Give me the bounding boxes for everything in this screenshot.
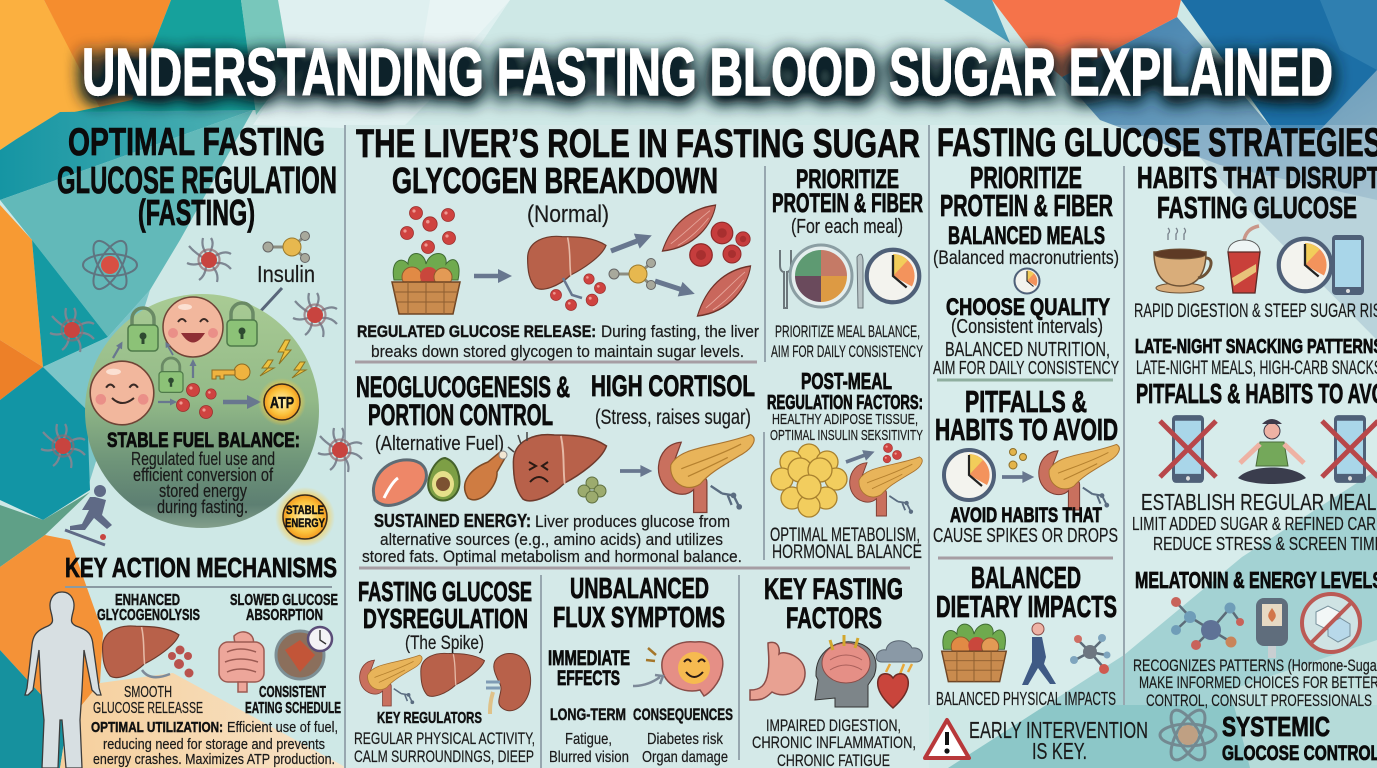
heading: PROTEIN & FIBER [772, 188, 923, 218]
heading: KEY FASTING [764, 573, 903, 606]
icon: glucose dots [176, 384, 216, 418]
heading: glycogen breakdown: GLYCOGEN BREAKDOWN [392, 160, 718, 201]
icon: phone [1332, 235, 1364, 295]
icon: walking person [1022, 623, 1056, 685]
text: key fasting factors list: IMPAIRED DIGESTION, [766, 716, 901, 735]
text: optimal utilization: OPTIMAL UTILIZATION: [91, 719, 223, 736]
icon: salmon [373, 460, 426, 505]
icon: ATP [258, 378, 306, 426]
icon: storm cloud [876, 641, 922, 674]
icon: heart [878, 674, 908, 708]
text: key fasting factors list: CHRONIC INFLAMMATION, [752, 733, 916, 752]
heading: FLUX SYMPTOMS [553, 602, 725, 634]
icon: coffee cup [1154, 228, 1211, 293]
text: sustained energy: SUSTAINED ENERGY: [374, 511, 531, 531]
icon: kidney [486, 653, 531, 714]
text: sustained energy [362, 511, 742, 566]
text: slowed glucose absorption [230, 592, 338, 624]
text: avoid habits: CAUSE SPIKES OR DROPS [933, 525, 1118, 547]
pointer line: insulin [258, 288, 282, 314]
text: long-term consequences: CONSEQUENCES [633, 705, 733, 724]
badge: stable energy: ENERGY [285, 516, 325, 530]
text: avoid habits: AVOID HABITS THAT [950, 504, 1102, 527]
panel: glycogen breakdown [355, 160, 759, 362]
text: balanced meals [933, 222, 1119, 269]
icon: crossed phone [1160, 415, 1216, 483]
heading: high cortisol: (Stress, raises sugar) [595, 406, 751, 429]
text: choose quality: BALANCED NUTRITION, [945, 339, 1110, 361]
heading: post-meal: OPTIMAL INSULIN SEKSITIVITY [770, 427, 923, 444]
heading: FASTING GLUCOSE [358, 576, 532, 607]
text: key fasting factors list [752, 716, 916, 768]
text: prioritize meal balance: PRIORITIZE MEAL BALANCE, [775, 322, 920, 341]
text: optimal metabolism: OPTIMAL METABOLISM, [770, 525, 920, 546]
icon: locks [128, 303, 257, 392]
heading: optimal fasting glucose regulation: OPTIMAL FASTING [68, 121, 325, 164]
text: enhanced glycogenolysis: GLYCOGENOLYSIS [97, 607, 200, 624]
panel: prioritize protein and fiber, meal [771, 164, 923, 361]
icon: molecule [609, 258, 656, 290]
panel: post-meal regulation factors [767, 368, 923, 563]
arrow [474, 269, 512, 283]
heading: FACTORS [786, 602, 882, 635]
label: insulin: Insulin [257, 261, 315, 287]
text: establish regular meals [1132, 489, 1377, 554]
heading: neoglucogenesis: NEOGLUCOGENESIS & [356, 371, 570, 404]
heading: glycogen breakdown: (Normal) [527, 201, 609, 228]
panel: unbalanced flux symptoms [548, 573, 733, 766]
icon: head with brain [815, 635, 876, 707]
heading: UNBALANCED [570, 573, 709, 605]
icon: pancreas [1039, 444, 1119, 510]
icon: liver [421, 653, 484, 696]
icon: molecule [1171, 597, 1244, 650]
text: balanced meals: (Balanced macronutrients) [933, 248, 1119, 269]
icon: chicken drumstick [465, 451, 507, 500]
circle: stable fuel balance [85, 294, 319, 528]
text: consistent eating schedule: CONSISTENT [259, 684, 326, 701]
heading: high cortisol [591, 370, 755, 429]
text: avoid habits [933, 504, 1118, 547]
text: stable fuel balance [107, 429, 300, 517]
arrow [608, 228, 655, 259]
icon: small clock [1014, 268, 1040, 294]
text: choose quality: CHOOSE QUALITY [946, 294, 1110, 321]
icon: glucose dots [883, 443, 902, 463]
text: optimal utilization: energy crashes. Maximizes ATP production. [93, 751, 335, 768]
heading: optimal fasting glucose regulation: GLUCOSE REGULATION [57, 160, 337, 202]
icon: pancreas [850, 457, 922, 516]
callout: systemic glucose control [1160, 705, 1377, 765]
icon: intestines [219, 632, 264, 692]
panel: strategies left column [933, 160, 1119, 709]
panel: key fasting factors [750, 573, 922, 768]
icon: warning triangle [925, 720, 969, 758]
text: late-night snacking [1135, 336, 1377, 379]
text: prioritize meal balance [771, 322, 923, 361]
text: choose quality: (Consistent intervals) [951, 316, 1103, 338]
text: stable fuel balance: STABLE FUEL BALANCE: [107, 429, 300, 452]
icon: molecule [1070, 634, 1110, 674]
text: smooth glucose release: SMOOTH [124, 684, 172, 701]
icon: stressed liver [508, 432, 606, 501]
text: optimal metabolism: HORMONAL BALANCE [772, 542, 922, 563]
callout: early intervention [925, 717, 1148, 764]
icon: key [212, 364, 250, 380]
heading [772, 164, 923, 238]
text: long-term consequences: Fatigue, [565, 731, 612, 748]
panel: neoglucogenesis and high cortisol [356, 370, 755, 566]
text: recognizes patterns [1133, 656, 1377, 710]
heading: pitfalls and habits to avoid: PITFALLS & [965, 384, 1087, 419]
heading: the liver's role: THE LIVER’S ROLE IN FASTING SUGAR [356, 122, 920, 166]
heading: prioritize protein and fiber [940, 160, 1113, 223]
text: consistent eating schedule [245, 684, 341, 717]
text: long-term consequences: LONG-TERM [550, 705, 626, 724]
text: choose quality: AIM FOR DAILY CONSISTENCY [933, 358, 1119, 378]
heading: post-meal: POST-MEAL [801, 368, 892, 394]
text: key regulators: KEY REGULATORS [377, 710, 482, 727]
heading: prioritize protein and fiber: PRIORITIZE [970, 160, 1082, 195]
icon: adipose tissue [771, 444, 847, 517]
text: early intervention: IS KEY. [1032, 738, 1087, 764]
heading: prioritize protein and fiber: PROTEIN & FIBER [940, 188, 1113, 223]
icon: pancreas [360, 655, 422, 706]
heading: key action mechanisms: KEY ACTION MECHANISMS [65, 552, 337, 583]
icon: lightning [260, 340, 306, 378]
text: key regulators: CALM SURROUNDINGS, DIEEP [354, 747, 534, 766]
heading: pitfalls and habits to avoid [935, 384, 1118, 447]
icon: virus particles [41, 238, 362, 472]
text: optimal utilization: reducing need for storage and prevents [103, 736, 325, 753]
icon: glucose dots falling [400, 206, 456, 254]
text: early intervention: EARLY INTERVENTION [969, 717, 1148, 743]
icon: avocado [428, 458, 459, 500]
text: smooth glucose release [93, 684, 203, 717]
text: systemic glucose control: SYSTEMIC [1222, 711, 1330, 742]
icon: happy brain [646, 642, 723, 696]
arrows [110, 340, 261, 409]
heading: balanced dietary impacts: DIETARY IMPACTS [936, 589, 1117, 624]
text: key regulators: REGULAR PHYSICAL ACTIVITY, [354, 729, 535, 748]
text: long-term consequences [549, 705, 733, 766]
text: sustained energy: alternative sources (e.g., amino acids) and utilizes [380, 530, 723, 549]
icon: liver [528, 236, 606, 289]
icon: clock [944, 450, 994, 500]
heading: optimal fasting glucose regulation [57, 121, 337, 233]
heading: neoglucogenesis [356, 371, 570, 455]
text: systemic glucose control [1222, 711, 1377, 765]
text: regulated glucose release: During fasting, the liver [601, 322, 759, 341]
icon: muscles [662, 205, 751, 316]
heading: neoglucogenesis: PORTION CONTROL [368, 399, 553, 432]
heading: post-meal [767, 368, 923, 444]
icon: soda cup [1228, 226, 1260, 293]
icon: runner [65, 485, 112, 545]
icon: plate with clock [276, 627, 332, 679]
panel: key action mechanisms [25, 552, 341, 768]
text: stable fuel balance: Regulated fuel use and [131, 449, 275, 469]
panel: fasting glucose dysregulation [354, 576, 535, 766]
text: regulated glucose release [357, 322, 759, 361]
text: stable fuel balance: stored energy [159, 481, 247, 501]
heading: (The Spike) [405, 633, 484, 654]
text: balanced meals: BALANCED MEALS [948, 222, 1105, 250]
text: immediate effects: EFFECTS [557, 667, 620, 690]
text: optimal metabolism [770, 525, 922, 563]
icon: clock [867, 250, 919, 302]
heading [358, 576, 532, 654]
heading: DYSREGULATION [363, 603, 528, 634]
heading [553, 573, 725, 634]
icon: no sugar [1302, 594, 1360, 652]
heading: pitfalls and habits to avoid: HABITS TO AVOID [935, 412, 1118, 447]
icon: liver with glucose [103, 626, 194, 678]
icon: glucose meter [1256, 598, 1288, 658]
icon: atom [1160, 705, 1216, 765]
icon: crossed phone [1322, 415, 1377, 483]
icon: meditating person [1238, 419, 1306, 484]
icon: clock [1279, 239, 1331, 291]
heading: balanced dietary impacts [936, 560, 1117, 624]
heading: habits that disrupt [1137, 160, 1377, 225]
icon: stomach [750, 642, 805, 700]
icon: insulin molecule [263, 232, 310, 262]
text: long-term consequences: Diabetes risk [647, 731, 724, 748]
heading: neoglucogenesis: (Alternative Fuel) [375, 433, 504, 455]
text: smooth glucose release: GLUCOSE RELEASSE [93, 700, 203, 717]
text: optimal utilization: Efficient use of fuel, [227, 719, 338, 736]
badge: stable energy [275, 487, 335, 547]
icon: atom [83, 236, 137, 294]
icon: falling dots and arrow [1002, 448, 1034, 483]
panel: optimal fasting glucose regulation [41, 121, 362, 547]
text: early intervention [969, 717, 1148, 764]
heading: balanced dietary impacts: BALANCED [971, 560, 1081, 595]
icon: food basket [942, 624, 1006, 682]
heading [764, 573, 903, 635]
icon: pancreas [658, 435, 754, 512]
icon: red blood cells [690, 222, 750, 266]
text: key regulators [354, 710, 535, 766]
text: regulated glucose release: REGULATED GLUCOSE RELEASE: [357, 322, 596, 341]
text: enhanced glycogenolysis [97, 592, 200, 624]
heading: PRIORITIZE [796, 164, 899, 194]
arrow [844, 446, 876, 467]
heading: high cortisol: HIGH CORTISOL [591, 370, 755, 403]
column dividers [345, 125, 1124, 768]
arrow [620, 465, 652, 477]
text: sustained energy: stored fats. Optimal metabolism and hormonal balance. [362, 547, 742, 566]
text: regulated glucose release: breaks down stored glycogen to maintain sugar levels. [371, 342, 744, 361]
icon: human body [25, 592, 101, 768]
text: long-term consequences: Organ damage [642, 749, 728, 766]
text: sustained energy: Liver produces glucose from [535, 512, 730, 531]
text: immediate effects: IMMEDIATE [548, 647, 630, 670]
icon: happy cells [90, 297, 223, 425]
arrow [653, 274, 697, 301]
text: stable fuel balance: during fasting. [157, 497, 248, 517]
icon: vegetable basket [392, 254, 460, 314]
heading: glycogen breakdown [392, 160, 718, 228]
text: stable fuel balance: efficient conversion of [133, 465, 274, 485]
badge: stable energy: STABLE [286, 503, 324, 517]
arrow [633, 675, 663, 686]
text: enhanced glycogenolysis: ENHANCED [115, 592, 180, 609]
text: slowed glucose absorption: ABSORPTION [246, 607, 323, 624]
heading: optimal fasting glucose regulation: (FASTING) [138, 192, 255, 233]
heading: post-meal: REGULATION FACTORS: [767, 392, 923, 414]
icon: ATP: ATP [270, 395, 294, 412]
panel: strategies right column [1132, 160, 1377, 710]
text: balanced physical impacts: BALANCED PHYSICAL IMPACTS [936, 689, 1116, 709]
icon: fork, plate, knife [780, 245, 863, 308]
heading: (For each meal) [791, 216, 903, 238]
text: consistent eating schedule: EATING SCHEDULE [245, 700, 341, 717]
text: prioritize meal balance: AIM FOR DAILY CONSISTENCY [771, 342, 923, 361]
text: choose quality [933, 294, 1119, 378]
text: long-term consequences: Blurred vision [549, 749, 629, 766]
text: optimal utilization [91, 719, 338, 768]
text: immediate effects [548, 647, 630, 690]
text: slowed glucose absorption: SLOWED GLUCOSE [230, 592, 338, 609]
icon: liver glucose dots [550, 274, 606, 311]
heading: post-meal: HEALTHY ADIPOSE TISSUE, [772, 411, 918, 428]
icon: small adipose cluster [578, 477, 606, 503]
